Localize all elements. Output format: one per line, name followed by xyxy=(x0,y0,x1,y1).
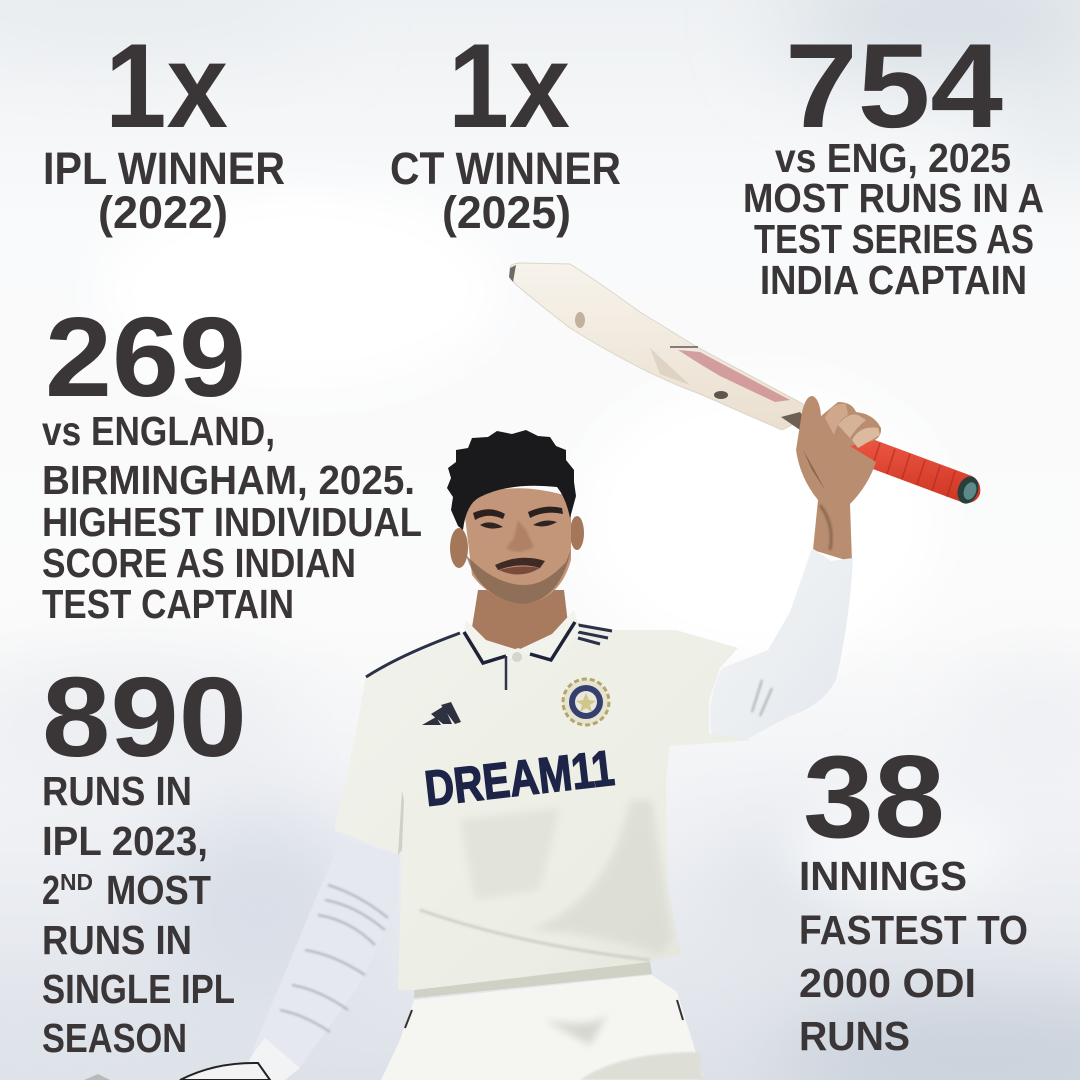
stat: 269 highest score: vs ENGLAND, xyxy=(42,408,275,454)
stat: 754 runs: INDIA CAPTAIN xyxy=(760,257,1027,303)
stat: 754 runs: vs ENG, 2025 xyxy=(775,135,1011,181)
stat: 269 highest score: TEST CAPTAIN xyxy=(42,581,294,627)
stat: 754 runs: MOST RUNS IN A xyxy=(743,175,1044,221)
collar xyxy=(464,610,580,690)
white trousers xyxy=(381,962,703,1080)
stat: 269 highest score: 269 xyxy=(45,294,246,420)
left arm sleeve xyxy=(240,838,400,1080)
raised hand and forearm xyxy=(796,396,881,562)
India crest badge xyxy=(563,679,609,725)
stat: 38 innings: 2000 ODI xyxy=(799,960,976,1006)
stat: 1x IPL winner: 1x xyxy=(105,19,228,153)
stat: 754 runs xyxy=(743,19,1044,303)
stat: 38 innings xyxy=(799,731,1028,1059)
stat: 890 IPL runs: RUNS IN xyxy=(42,917,192,963)
stat: 269 highest score xyxy=(42,294,422,627)
stat: 38 innings: RUNS xyxy=(799,1013,910,1059)
stat: 1x IPL winner xyxy=(43,19,285,238)
stat: 890 IPL runs: RUNS IN xyxy=(42,768,192,814)
stat: 754 runs: TEST SERIES AS xyxy=(754,216,1034,262)
glove xyxy=(84,1063,270,1080)
sponsor text DREAM11: DREAM11 xyxy=(422,740,617,817)
stat: 1x CT winner: (2025) xyxy=(442,187,571,238)
stat: 1x CT winner: 1x xyxy=(448,19,570,153)
right arm sleeve xyxy=(710,548,853,740)
stat: 1x IPL winner: IPL WINNER xyxy=(43,143,285,194)
bat grip xyxy=(834,430,982,507)
stat: 890 IPL runs xyxy=(42,654,247,1061)
stat: 269 highest score: HIGHEST INDIVIDUAL xyxy=(42,499,422,545)
stat: 38 innings: INNINGS xyxy=(799,853,967,899)
stat: 890 IPL runs: 890 xyxy=(42,654,247,780)
stat: 890 IPL runs: SEASON xyxy=(42,1015,187,1061)
stat: 754 runs: 754 xyxy=(785,19,1003,153)
stat: 1x CT winner xyxy=(390,19,621,238)
head xyxy=(447,430,584,604)
left ear xyxy=(450,528,468,568)
stat: 38 innings: 38 xyxy=(803,731,945,862)
white cricket shirt xyxy=(334,622,752,990)
stat: 890 IPL runs: IPL 2023, xyxy=(42,818,208,864)
stat: 269 highest score: SCORE AS INDIAN xyxy=(42,540,356,586)
neck xyxy=(470,590,570,650)
stat: 38 innings: FASTEST TO xyxy=(799,907,1028,953)
cricket bat xyxy=(509,263,806,430)
stat: 890 IPL runs: 2 xyxy=(42,867,60,913)
stat: 1x IPL winner: (2022) xyxy=(98,187,228,238)
stat: 890 IPL runs: SINGLE IPL xyxy=(42,966,235,1012)
stat: 890 IPL runs: MOST xyxy=(106,867,211,913)
stat: 890 IPL runs: ND xyxy=(60,869,93,895)
adidas logo xyxy=(422,702,461,725)
stat: 1x CT winner: CT WINNER xyxy=(390,143,621,194)
stat: 269 highest score: BIRMINGHAM, 2025. xyxy=(42,457,415,503)
